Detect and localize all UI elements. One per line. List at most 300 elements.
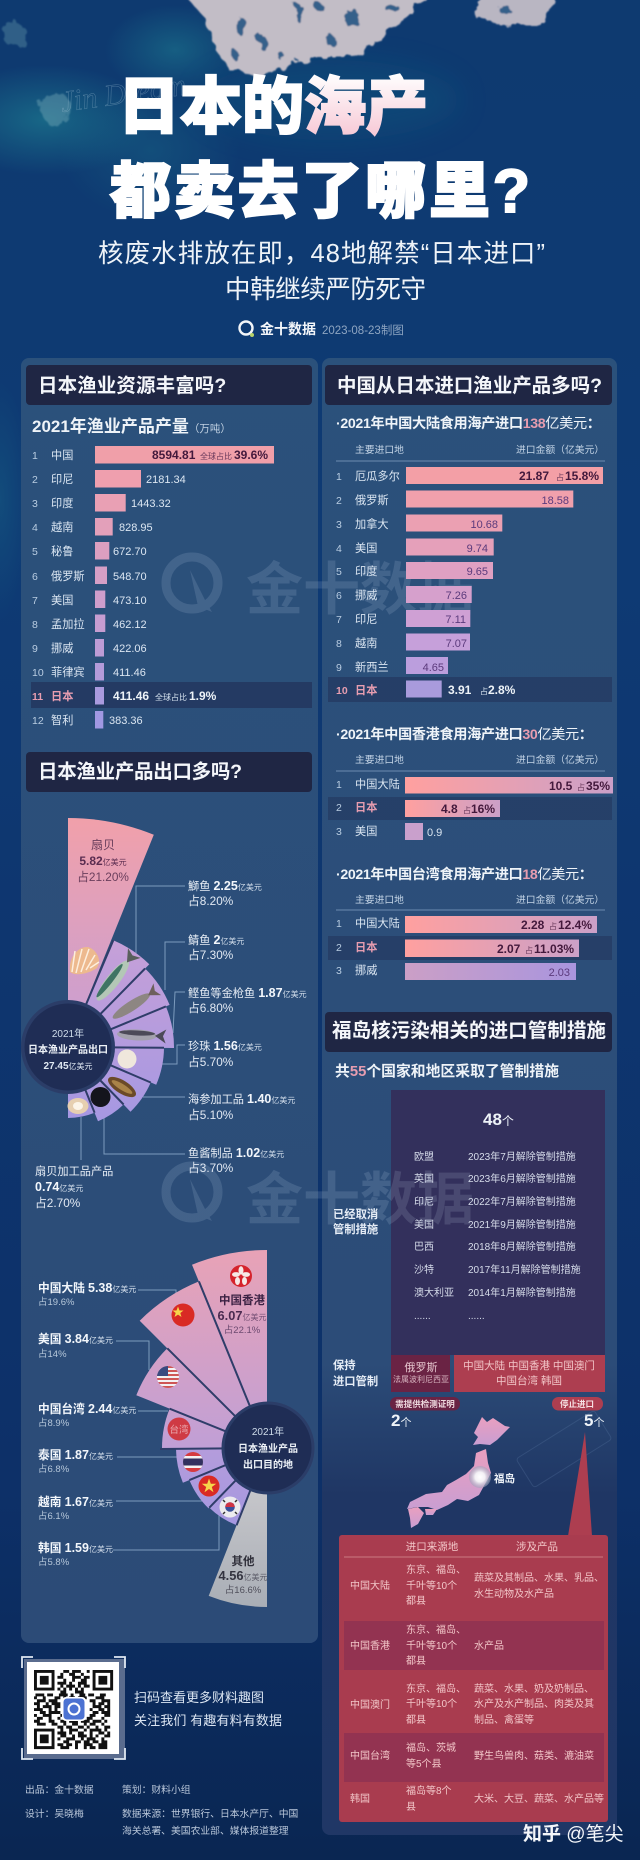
table: import ban detail: 东京、福岛、	[406, 1682, 466, 1695]
bar chart: mainland China imports: 21.87	[519, 469, 549, 483]
bar chart: Taiwan imports	[328, 866, 612, 980]
table: import ban detail: 东京、福岛、	[406, 1623, 466, 1636]
bar chart: Taiwan imports: 2.28	[521, 918, 545, 932]
bar chart: mainland China imports: 7.26	[446, 590, 467, 602]
label: Vietnam	[38, 1495, 113, 1522]
panel: lifted controls: 2023年6月解除管制措施	[468, 1172, 576, 1185]
table: import ban detail: 野生鸟兽肉、菇类、漉油菜	[474, 1749, 594, 1762]
icon: pearl	[118, 1050, 136, 1068]
table: import ban detail: 中国台湾	[350, 1749, 390, 1762]
bar chart: mainland China imports: 占	[556, 472, 564, 482]
center circle: 2021年	[252, 1425, 284, 1438]
label: Hong Kong: 6.07亿美元	[218, 1308, 266, 1323]
bar chart: Hong Kong imports	[328, 726, 613, 840]
bar chart: mainland China imports: 主要进口地	[355, 443, 404, 456]
table: import ban detail: 大米、大豆、蔬菜、水产品等	[474, 1792, 604, 1805]
bar chart: mainland China imports: 8	[336, 638, 342, 650]
label: bonito tuna: 鲣鱼等金枪鱼 1.87亿美元	[188, 986, 307, 1000]
bar chart: Hong Kong imports: 10.5	[549, 779, 573, 793]
bar chart: mainland China imports: 10	[336, 685, 348, 697]
label: pearl: 占5.70%	[188, 1055, 234, 1069]
panel: lifted controls: 印尼	[414, 1196, 434, 1208]
table: import ban detail: 都县	[406, 1655, 426, 1667]
QR code	[22, 1657, 125, 1759]
label: scallop: 5.82亿美元	[79, 854, 127, 868]
leader lines	[113, 1290, 219, 1550]
bar chart: 2021 fishery output: 美国	[51, 594, 73, 607]
icon: processed scallop	[68, 1098, 88, 1114]
label: Hong Kong: 占22.1%	[224, 1324, 261, 1336]
bar chart: Taiwan imports: 占	[549, 921, 557, 931]
bar chart: 2021 fishery output: 5	[32, 546, 38, 558]
controls subtitle: 共55个国家和地区采取了管制措施	[335, 1062, 559, 1080]
bar chart: mainland China imports: 印尼	[355, 613, 377, 626]
bar chart: Taiwan imports: 中国大陆	[355, 916, 400, 930]
center circle: 日本渔业产品出口	[28, 1043, 108, 1056]
bar chart: 2021 fishery output: 1.9%	[189, 689, 217, 703]
icon: fish roe	[90, 1087, 110, 1107]
table: import ban detail: 制品、禽蛋等	[474, 1713, 534, 1726]
bar chart: Hong Kong imports: 美国	[355, 825, 377, 838]
bar chart: 2021 fishery output: 3	[32, 498, 38, 510]
icon: South Korea flag	[220, 1496, 240, 1518]
panel: import ban: 中国台湾 韩国	[496, 1374, 562, 1387]
label: China mainland: 中国大陆 5.38亿美元	[38, 1281, 136, 1295]
bar chart: Taiwan imports: 2.07	[497, 942, 521, 956]
icon: mackerel	[109, 983, 161, 1024]
credits: 设计：吴晓梅	[25, 1807, 84, 1820]
sectors: destinations	[136, 1250, 267, 1449]
sector dividers	[160, 1281, 267, 1525]
QR caption: 关注我们 有趣有料有数据	[134, 1713, 282, 1728]
bar chart: mainland China imports: 占	[480, 686, 488, 696]
panel: import ban	[454, 1355, 605, 1392]
bar chart: mainland China imports: 2	[336, 495, 342, 507]
bar chart: Taiwan imports: ·2021年中国台湾食用海产进口18亿美元：	[336, 866, 593, 883]
bar chart: mainland China imports: 7.07	[446, 638, 467, 650]
fan chart: export destinations	[38, 1250, 314, 1607]
bar chart: 2021 fishery output: 10	[32, 667, 44, 679]
center circle	[21, 1000, 115, 1094]
sectors: smaller destinations	[176, 1448, 267, 1525]
label: yellowtail: 占8.20%	[188, 894, 234, 908]
heading: fishery exports: 日本渔业产品出口多吗?	[38, 761, 242, 783]
bar chart: Hong Kong imports: 35%	[586, 779, 610, 793]
bar chart: 2021 fishery output: 俄罗斯	[51, 570, 85, 583]
bar chart: 2021 fishery output: 12	[32, 715, 44, 727]
label: Taiwan: 中国台湾 2.44亿美元	[38, 1402, 136, 1416]
sector dividers	[68, 940, 166, 1113]
label: scallop	[77, 837, 129, 884]
table: import ban detail: 蔬菜及其制品、水果、乳品、	[474, 1571, 604, 1584]
bar chart: 2021 fishery output: 孟加拉	[51, 617, 85, 631]
pill: testing required: 需提供检测证明	[395, 1399, 455, 1409]
bar chart: 2021 fishery output: 383.36	[109, 715, 143, 727]
bar chart: mainland China imports: ·2021年中国大陆食用海产进口138亿美元：	[336, 415, 601, 432]
label: processed scallop	[35, 1164, 113, 1210]
bar chart: Hong Kong imports: 3	[336, 826, 342, 838]
label: others: 4.56亿美元	[219, 1568, 267, 1583]
icon: sea cucumber	[105, 1073, 139, 1101]
bar chart: Taiwan imports: 2	[336, 942, 342, 954]
table: import ban detail: 千叶等10个	[406, 1697, 457, 1710]
bar chart: 2021 fishery output: 越南	[51, 520, 73, 534]
bar chart: mainland China imports: 9	[336, 662, 342, 674]
label: sea cucumber: 占5.10%	[188, 1108, 234, 1122]
pill: import ban	[552, 1397, 603, 1410]
watermark: lower: 金十数据	[246, 1168, 474, 1232]
bar chart: 2021 fishery output: 11	[32, 691, 43, 703]
label: Hong Kong	[218, 1293, 266, 1336]
label: mackerel: 占7.30%	[188, 948, 234, 962]
bar chart: mainland China imports: 4.65	[423, 662, 444, 674]
bar chart: 2021 fishery output: 8	[32, 619, 38, 631]
label: retained	[333, 1358, 378, 1388]
icon: Vietnam flag	[198, 1476, 220, 1496]
table: import ban detail: 千叶等10个	[406, 1639, 457, 1652]
icon: yellowtail fish	[91, 948, 141, 1005]
bar chart: Taiwan imports: 3	[336, 965, 342, 977]
label: lifted	[333, 1207, 379, 1236]
bar chart: mainland China imports: 5	[336, 566, 342, 578]
table: import ban detail: 蔬菜、水果、奶及奶制品、	[474, 1682, 594, 1695]
bar chart: Taiwan imports: 1	[336, 918, 342, 930]
icon: scallop shell	[70, 947, 99, 974]
label: South Korea: 占5.8%	[38, 1556, 70, 1568]
table: import ban detail: 福岛、茨城	[406, 1741, 456, 1754]
label: Thailand	[38, 1448, 113, 1475]
title: 都卖去了哪里?	[110, 157, 530, 225]
bar chart: mainland China imports	[328, 415, 612, 702]
subtitle: 中韩继续严防死守	[225, 276, 426, 304]
center circle	[222, 1402, 314, 1494]
label: scallop: 扇贝	[91, 837, 115, 852]
panel: lifted controls: ......	[468, 1311, 485, 1322]
table: import ban detail	[339, 1535, 608, 1822]
bar chart: mainland China imports: 俄罗斯	[355, 494, 389, 507]
label: others: 占16.6%	[225, 1584, 262, 1596]
panel: right column background	[322, 358, 617, 1835]
label: fish roe	[188, 1146, 284, 1175]
label: Thailand: 泰国 1.87亿美元	[38, 1448, 113, 1462]
bar chart: Hong Kong imports: 进口金额（亿美元）	[516, 753, 604, 766]
panel: lifted controls: 巴西	[414, 1241, 434, 1253]
icon: Fukushima marker	[469, 1466, 491, 1488]
bar chart: Taiwan imports: 11.03%	[534, 942, 574, 956]
bar chart: 2021 fishery output: 1	[32, 450, 38, 462]
map: Japan: 福岛	[494, 1472, 515, 1485]
table: import ban detail: 进口来源地	[406, 1540, 459, 1553]
label: scallop: 占21.20%	[77, 870, 129, 884]
heading: Fukushima controls: 福岛核污染相关的进口管制措施	[332, 1019, 606, 1042]
bar chart: 2021 fishery output: 7	[32, 595, 38, 607]
table: import ban detail: 东京、福岛、	[406, 1563, 466, 1576]
table: import ban detail: 水生动物及水产品	[474, 1587, 554, 1600]
bar chart: Hong Kong imports: 主要进口地	[355, 753, 404, 766]
bar chart: 2021 fishery output: 印尼	[51, 473, 73, 486]
label: Vietnam: 越南 1.67亿美元	[38, 1495, 113, 1509]
table: import ban detail: 都县	[406, 1714, 426, 1726]
title	[110, 73, 530, 225]
table: import ban detail: 县	[406, 1801, 416, 1813]
label: Hong Kong: 中国香港	[219, 1293, 265, 1307]
label: Vietnam: 占6.1%	[38, 1510, 70, 1522]
bar chart: 2021 fishery output: 2181.34	[146, 474, 186, 486]
bar chart: 2021 fishery output: 日本	[51, 689, 73, 703]
subtitle: 核废水排放在即，48地解禁“日本进口”	[98, 240, 545, 268]
label: USA: 美国 3.84亿美元	[38, 1332, 113, 1346]
bar chart: 2021 fishery output: 411.46	[113, 689, 149, 703]
icon: US flag	[157, 1366, 179, 1388]
bar chart: Taiwan imports: 12.4%	[558, 918, 592, 932]
bar chart: 2021 fishery output: 智利	[51, 713, 73, 727]
label: pearl: 珍珠 1.56亿美元	[188, 1039, 262, 1053]
bar chart: mainland China imports: 9.74	[467, 543, 488, 555]
credits: 策划：财料小组	[122, 1783, 191, 1796]
bar chart: mainland China imports: 3	[336, 519, 342, 531]
bar chart: Taiwan imports: 日本	[355, 940, 377, 954]
bar chart: mainland China imports: 1	[336, 471, 342, 483]
icon: China flag	[172, 1304, 194, 1326]
count: 2: 2个	[391, 1411, 411, 1430]
bar chart: mainland China imports: 新西兰	[355, 660, 389, 674]
bar chart: mainland China imports: 美国	[355, 542, 377, 555]
label: lifted: 管制措施	[333, 1222, 379, 1236]
bar chart: Taiwan imports: 主要进口地	[355, 893, 404, 906]
label: USA	[38, 1332, 113, 1360]
bar chart: 2021 fishery output: 8594.81	[152, 448, 196, 462]
heading: fishery exports	[26, 752, 312, 792]
bar chart: 2021 fishery output: 462.12	[113, 619, 147, 631]
heading: fishery resources	[26, 365, 312, 405]
bar chart: mainland China imports: 日本	[355, 683, 377, 697]
bar chart: mainland China imports: 6	[336, 590, 342, 602]
credits: 出品：金十数据	[25, 1783, 94, 1796]
panel: lifted controls: ......	[414, 1311, 431, 1322]
label: Thailand: 占6.8%	[38, 1463, 70, 1475]
table: import ban detail: 等5个县	[406, 1757, 442, 1770]
brand line: 金十数据	[260, 321, 316, 337]
credits: 数据来源：世界银行、日本水产厅、中国	[122, 1807, 298, 1820]
panel: left column background	[21, 358, 318, 1643]
label: China mainland: 占19.6%	[38, 1296, 75, 1308]
label: retained: 保持	[333, 1358, 356, 1372]
bar chart: Taiwan imports: 占	[525, 945, 533, 955]
panel: lifted controls	[391, 1090, 605, 1355]
bar chart: Taiwan imports: 进口金额（亿美元）	[516, 893, 604, 906]
table: import ban detail: 水产品	[474, 1639, 504, 1652]
panel: lifted controls: 2018年8月解除管制措施	[468, 1240, 576, 1253]
bar chart: Hong Kong imports: 16%	[471, 802, 495, 816]
label: South Korea	[38, 1541, 113, 1568]
table: import ban detail: 千叶等10个	[406, 1579, 457, 1592]
center circle: 2021年	[52, 1027, 84, 1040]
stamp decoration	[516, 1410, 612, 1488]
bar chart: mainland China imports: 7.11	[445, 614, 466, 626]
bar chart: 2021 fishery output: 2021年渔业产品产量（万吨）	[32, 416, 231, 436]
label: China mainland	[38, 1281, 136, 1308]
label: Taiwan	[38, 1402, 136, 1429]
fan chart: export products	[21, 818, 307, 1210]
panel: lifted controls: 2017年11月解除管制措施	[468, 1263, 581, 1276]
table: import ban detail: 都县	[406, 1595, 426, 1607]
bar chart: 2021 fishery output: 473.10	[113, 595, 147, 607]
bar chart: mainland China imports: 挪威	[355, 588, 377, 602]
bar chart: 2021 fishery output: 9	[32, 643, 38, 655]
label: mackerel: 鲭鱼 2亿美元	[188, 933, 244, 947]
label: retained: 进口管制	[333, 1374, 378, 1388]
watermark: upper: 金十数据	[246, 558, 474, 622]
label: processed scallop: 扇贝加工品产品	[35, 1164, 113, 1178]
bar chart: Taiwan imports: 2.03	[549, 967, 570, 979]
panel: lifted controls: 美国	[414, 1218, 434, 1231]
bar chart: Hong Kong imports: 占	[577, 782, 585, 792]
center circle: 27.45亿美元	[43, 1061, 93, 1072]
subtitle	[98, 240, 545, 304]
brand line	[240, 321, 404, 337]
label: mackerel	[188, 933, 244, 962]
bar chart: mainland China imports: 3.91	[448, 683, 472, 697]
sector: scallop	[68, 818, 154, 1047]
label: South Korea: 韩国 1.59亿美元	[38, 1541, 113, 1555]
table: import ban detail: 中国大陆	[350, 1579, 390, 1592]
bar chart: mainland China imports: 9.65	[467, 566, 488, 578]
title: 日本的海产	[118, 73, 428, 142]
bar chart: 2021 fishery output: 全球占比	[200, 451, 232, 461]
credits	[25, 1783, 298, 1837]
label: yellowtail: 鰤鱼 2.25亿美元	[188, 879, 262, 893]
credits: 海关总署、美国农业部、媒体报道整理	[122, 1824, 289, 1837]
bar chart: 2021 fishery output: 1443.32	[131, 498, 171, 510]
bar chart: Hong Kong imports: 0.9	[427, 827, 442, 839]
heading: Fukushima controls	[325, 1012, 612, 1052]
QR caption	[134, 1690, 282, 1728]
label: others	[219, 1554, 267, 1596]
label: processed scallop: 0.74亿美元	[35, 1180, 83, 1194]
label: yellowtail	[188, 879, 262, 908]
label: fish roe: 鱼酱制品 1.02亿美元	[188, 1146, 284, 1160]
panel: lifted controls: 欧盟	[414, 1151, 434, 1163]
bar chart: 2021 fishery output: 411.46	[113, 667, 146, 679]
panel: testing required	[391, 1355, 450, 1392]
pill: import ban: 停止进口	[560, 1399, 594, 1409]
panel: lifted controls: 澳大利亚	[414, 1286, 454, 1299]
bar chart: Taiwan imports: 挪威	[355, 963, 377, 977]
label: sea cucumber	[188, 1092, 295, 1122]
icon: tuna	[117, 1027, 166, 1043]
bar chart: mainland China imports: 进口金额（亿美元）	[516, 443, 604, 456]
label: sea cucumber: 海参加工品 1.40亿美元	[188, 1092, 295, 1106]
bar chart: 2021 fishery output: 2	[32, 474, 38, 486]
bar chart: 2021 fishery output: 548.70	[113, 571, 147, 583]
bar chart: mainland China imports: 7	[336, 614, 342, 626]
center circle: 日本渔业产品	[238, 1442, 298, 1455]
label: processed scallop: 占2.70%	[35, 1196, 81, 1210]
sector: others	[209, 1448, 267, 1607]
label: fish roe: 占3.70%	[188, 1161, 234, 1175]
panel: lifted controls: 2023年7月解除管制措施	[468, 1150, 576, 1163]
bar chart: 2021 fishery output	[31, 416, 312, 728]
pill: testing required	[390, 1397, 460, 1410]
icon: Taiwan badge	[168, 1418, 190, 1440]
sectors: other products	[68, 940, 174, 1121]
bar chart: Hong Kong imports: 2	[336, 802, 342, 814]
count: 5: 5个	[584, 1411, 604, 1430]
panel: lifted controls: 2021年9月解除管制措施	[468, 1218, 576, 1231]
panel: lifted controls: 2014年1月解除管制措施	[468, 1286, 576, 1299]
bar chart: mainland China imports: 厄瓜多尔	[355, 469, 400, 483]
panel: testing required: 法属波利尼西亚	[393, 1374, 449, 1384]
brand line: 2023-08-23制图	[322, 324, 404, 337]
bar chart: 2021 fishery output: 422.06	[113, 643, 147, 655]
icon: Thailand flag	[183, 1452, 203, 1472]
bar chart: 2021 fishery output: 挪威	[51, 641, 73, 655]
bar chart: mainland China imports: 2.8%	[488, 683, 516, 697]
panel: lifted controls: 48个	[483, 1110, 514, 1129]
bar chart: 2021 fishery output: 全球占比	[155, 692, 187, 702]
bar chart: 2021 fishery output: 秘鲁	[51, 544, 73, 558]
bar chart: Hong Kong imports: ·2021年中国香港食用海产进口30亿美元：	[336, 726, 593, 743]
bar chart: mainland China imports: 15.8%	[565, 469, 599, 483]
bar chart: Hong Kong imports: 占	[463, 805, 471, 815]
map: Japan	[407, 1417, 515, 1528]
bar chart: 2021 fishery output: 印度	[51, 496, 73, 510]
label: USA: 占14%	[38, 1348, 67, 1360]
heading: China imports	[325, 365, 612, 405]
bar chart: Hong Kong imports: 中国大陆	[355, 777, 400, 791]
label: bonito tuna: 占6.80%	[188, 1001, 234, 1015]
bar chart: Hong Kong imports: 4.8	[441, 802, 458, 816]
label: bonito tuna	[188, 986, 307, 1015]
bar chart: Hong Kong imports: 1	[336, 779, 342, 791]
table: import ban detail: 涉及产品	[516, 1540, 558, 1553]
panel: import ban: 中国大陆 中国香港 中国澳门	[463, 1359, 595, 1372]
QR caption: 扫码查看更多财料趣图	[134, 1690, 264, 1705]
bar chart: mainland China imports: 印度	[355, 564, 377, 578]
bar chart: mainland China imports: 18.58	[541, 495, 569, 507]
label: Taiwan: 占8.9%	[38, 1417, 70, 1429]
arrow: ban to table	[568, 1432, 592, 1536]
table: import ban detail: 中国澳门	[350, 1698, 390, 1711]
bar chart: 2021 fishery output: 828.95	[119, 522, 153, 534]
center circle: 出口目的地	[243, 1458, 293, 1471]
credit: Zhihu: 知乎 @笔尖	[523, 1823, 624, 1845]
bar chart: mainland China imports: 越南	[355, 636, 377, 650]
label: others: 其他	[232, 1554, 255, 1568]
bar chart: mainland China imports: 加拿大	[355, 517, 389, 531]
bar chart: 2021 fishery output: 39.6%	[234, 448, 268, 462]
heading: fishery resources: 日本渔业资源丰富吗?	[38, 374, 226, 397]
bar chart: 2021 fishery output: 4	[32, 522, 38, 534]
bar chart: mainland China imports: 10.68	[470, 519, 498, 531]
bar chart: mainland China imports: 4	[336, 543, 342, 555]
label: lifted: 已经取消	[333, 1207, 378, 1221]
panel: lifted controls: 英国	[414, 1172, 434, 1185]
bar chart: Hong Kong imports: 日本	[355, 800, 377, 814]
panel: lifted controls: 2022年7月解除管制措施	[468, 1195, 576, 1208]
heading: China imports: 中国从日本进口渔业产品多吗?	[337, 375, 602, 397]
icon: Taiwan badge: 台湾	[169, 1424, 189, 1436]
bar chart: 2021 fishery output: 672.70	[113, 546, 147, 558]
label: pearl	[188, 1039, 262, 1069]
panel: testing required: 俄罗斯	[404, 1361, 438, 1374]
table: import ban detail: 水产及水产制品、肉类及其	[474, 1697, 594, 1710]
table: import ban detail: 韩国	[350, 1792, 370, 1805]
bar chart: 2021 fishery output: 菲律宾	[51, 665, 85, 679]
table: import ban detail: 福岛等8个	[406, 1784, 452, 1797]
icon: Hong Kong flag	[230, 1265, 252, 1287]
script watermark: Jin Dream	[58, 69, 188, 119]
